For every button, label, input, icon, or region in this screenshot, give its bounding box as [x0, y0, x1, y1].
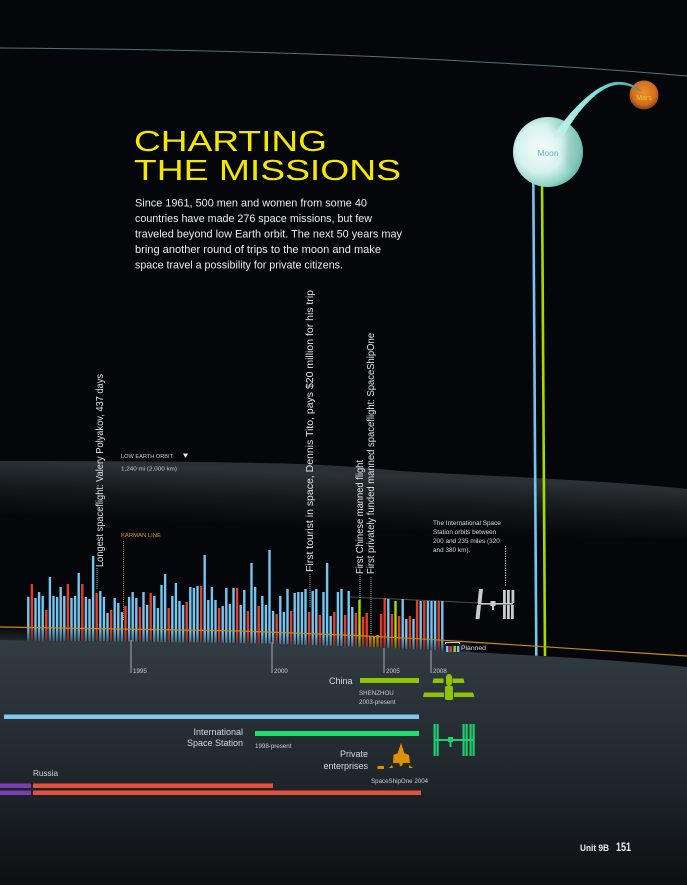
Mars label: Mars	[636, 95, 652, 102]
low Earth orbit label	[121, 454, 188, 472]
program: International Space Station: Space Station	[187, 738, 243, 748]
low Earth orbit atmosphere band	[0, 461, 687, 540]
orange Karman line	[0, 627, 687, 656]
icon: green Shenzhou spacecraft	[423, 674, 474, 700]
Karman line label: KÁRMÁN LINE	[121, 532, 161, 539]
planned legend	[446, 642, 486, 652]
folio: page number: Unit 9B	[580, 843, 609, 853]
icon: white space station	[476, 589, 514, 619]
low Earth orbit label: 1,240 mi (2,000 km)	[121, 466, 177, 472]
planned legend: Planned	[461, 645, 486, 652]
program: International Space Station	[187, 727, 419, 750]
intro text	[135, 198, 402, 272]
program: Russia: Russia	[33, 769, 58, 778]
low Earth orbit label: LOW EARTH ORBIT	[121, 454, 173, 460]
intro text: traveled beyond low Earth orbit. The next 50 years may	[135, 228, 402, 240]
ISS orbit note: Station orbits between	[433, 529, 497, 536]
vertical bar: green	[542, 180, 545, 656]
annotation: first Chinese flight: First Chinese manned flight	[355, 460, 366, 574]
moon	[513, 117, 583, 187]
tick 2008	[431, 650, 447, 675]
title	[134, 126, 401, 187]
tick 2000: 2000	[274, 668, 288, 675]
vertical bar: blue	[533, 180, 536, 656]
icon: orange SpaceShipOne	[378, 743, 413, 769]
intro text: bring another round of trips to the moon and make	[135, 244, 381, 256]
tick 2000	[272, 642, 288, 675]
annotation: SpaceShipOne: First privately funded manned spaceflight: SpaceShipOne	[366, 333, 377, 574]
program: China: 2003-present	[359, 699, 396, 706]
bars: NASA missions	[28, 550, 442, 656]
Mars	[630, 80, 658, 110]
ISS orbit note	[433, 520, 506, 586]
moon trail to Mars	[552, 82, 642, 138]
program: International Space Station: 1998-present	[255, 743, 292, 750]
program: NASA shuttle bar	[4, 714, 419, 719]
ISS orbit note: and 380 km).	[433, 547, 471, 554]
program: Private enterprises: SpaceShipOne 2004	[371, 778, 429, 785]
bars: China missions	[360, 600, 396, 656]
program: Russia	[33, 769, 421, 795]
year axis	[131, 640, 447, 675]
Karman line label	[121, 532, 161, 620]
bar fade near ground	[0, 626, 470, 655]
folio: page number: 151	[616, 840, 631, 854]
intro text: Since 1961, 500 men and women from some 40	[135, 198, 367, 210]
tick 1995	[131, 640, 147, 675]
program: early purple bars	[0, 784, 31, 795]
title: CHARTING	[134, 126, 327, 158]
tick 2008: 2008	[433, 668, 447, 675]
title: THE MISSIONS	[134, 155, 401, 187]
program: Private enterprises: enterprises	[323, 761, 368, 771]
ISS orbit line	[350, 597, 480, 603]
folio: page number	[580, 840, 631, 854]
top orbit arc	[0, 48, 687, 76]
intro text: countries have made 276 space missions, but few	[135, 213, 373, 225]
tick 2005: 2005	[386, 668, 400, 675]
annotation: first tourist: First tourist in space, Dennis Tito, pays $20 million for his trip	[305, 290, 316, 572]
ISS orbit note: The International Space	[433, 520, 501, 527]
moon label: Moon	[538, 148, 559, 158]
program: Private enterprises: Private	[340, 749, 368, 759]
program: China	[329, 676, 419, 706]
program: Private enterprises	[323, 749, 429, 785]
ISS orbit note: 200 and 235 miles (320	[433, 538, 500, 545]
bars: Russia missions	[32, 584, 439, 656]
program: China: China	[329, 676, 353, 686]
icon: green space station	[434, 724, 475, 756]
intro text: space travel a possibility for private citizens.	[135, 260, 343, 272]
Earth ground	[0, 640, 687, 885]
annotation: longest spaceflight: Longest spaceflight: Valery Polyakov, 437 days	[95, 374, 106, 567]
program: International Space Station: International	[193, 727, 243, 737]
mission bar chart	[28, 550, 442, 656]
tick 2005	[384, 648, 400, 675]
program: China: SHENZHOU	[359, 690, 394, 697]
moon vertical bars	[533, 180, 545, 656]
bars: private missions	[370, 635, 378, 656]
tick 1995: 1995	[133, 668, 147, 675]
